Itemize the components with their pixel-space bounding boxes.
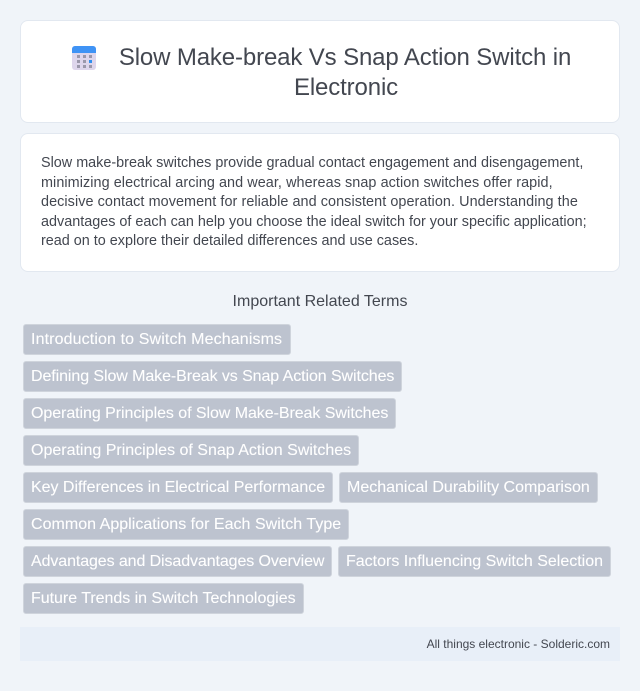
tag	[23, 435, 359, 466]
tag	[23, 398, 396, 429]
tag	[23, 324, 291, 355]
tag	[23, 546, 332, 577]
tag: Defining Slow Make-Break vs Snap Action Switches	[31, 368, 394, 385]
tags list	[23, 324, 611, 614]
intro paragraph: minimizing electrical arcing and wear, whereas snap action switches offer rapid,	[41, 174, 553, 190]
footer	[20, 627, 620, 661]
footer credit: All things electronic - Solderic.com	[427, 637, 610, 651]
intro paragraph: advantages of each can help you choose the ideal switch for your specific application;	[41, 214, 587, 230]
intro paragraph: decisive contact movement for reliable and consistent operation. Understanding the	[41, 194, 578, 210]
intro paragraph: read on to explore their detailed differences and use cases.	[41, 233, 418, 249]
tag	[338, 546, 611, 577]
intro text panel	[20, 133, 620, 272]
tag	[23, 361, 402, 392]
tag: Introduction to Switch Mechanisms	[31, 331, 282, 348]
heading: Electronic	[294, 74, 398, 101]
heading: Slow Make-break Vs Snap Action Switch in	[119, 44, 571, 71]
intro paragraph	[41, 155, 587, 249]
heading	[119, 44, 571, 101]
tag: Mechanical Durability Comparison	[347, 479, 590, 496]
tag: Common Applications for Each Switch Type	[31, 516, 341, 533]
intro paragraph: Slow make-break switches provide gradual contact engagement and disengagement,	[41, 155, 583, 171]
tag	[23, 509, 349, 540]
tag: Future Trends in Switch Technologies	[31, 590, 296, 607]
tag: Operating Principles of Snap Action Switches	[31, 442, 351, 459]
tag	[339, 472, 598, 503]
title card	[20, 20, 620, 123]
tag: Factors Influencing Switch Selection	[346, 553, 603, 570]
tag: Advantages and Disadvantages Overview	[31, 553, 324, 570]
related terms heading: Important Related Terms	[233, 293, 407, 310]
tag: Operating Principles of Slow Make-Break Switches	[31, 405, 388, 422]
tag	[23, 472, 333, 503]
icon: calendar grid	[72, 46, 96, 70]
tag	[23, 583, 304, 614]
tag: Key Differences in Electrical Performance	[31, 479, 325, 496]
